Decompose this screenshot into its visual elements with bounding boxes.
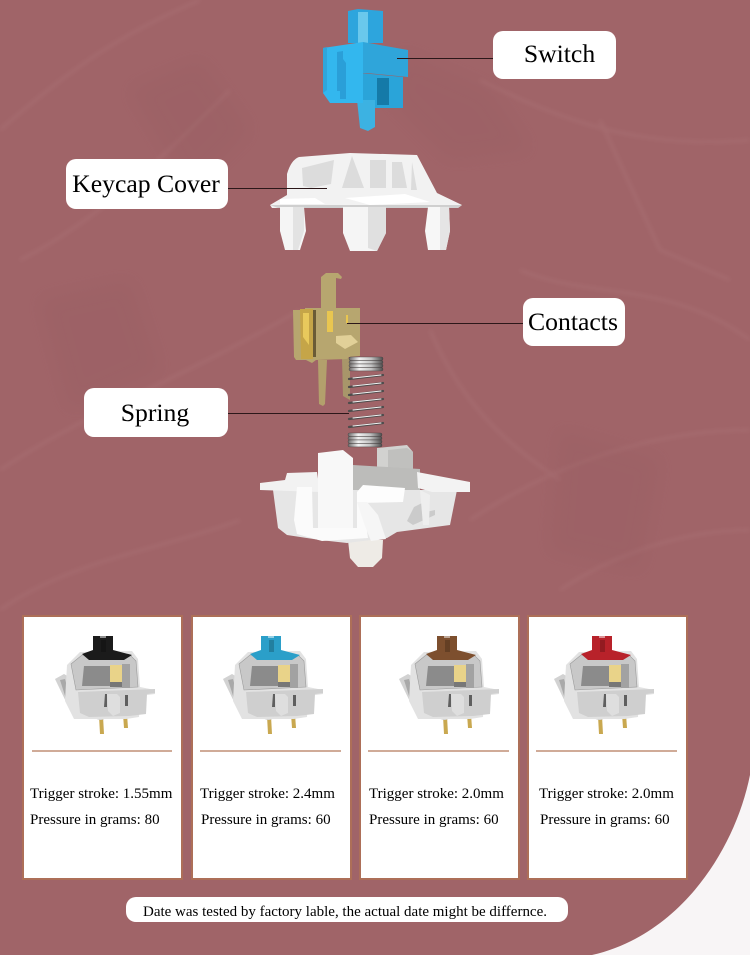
specs: blue switch [200, 786, 335, 828]
label: Keycap Cover: Keycap Cover [72, 169, 220, 198]
label: Spring: Spring [121, 398, 189, 427]
label: Contacts: Contacts [528, 307, 618, 336]
label: Switch [397, 31, 616, 79]
label: Keycap Cover [66, 159, 327, 209]
specs: red switch: Pressure in grams: 60 [540, 812, 670, 828]
bottom-right white curved corner [592, 775, 750, 955]
specs: brown switch [369, 786, 504, 828]
card: red switch [528, 616, 687, 879]
specs: black switch: Pressure in grams: 80 [30, 812, 160, 828]
label: Switch: Switch [524, 39, 595, 68]
specs: brown switch: Pressure in grams: 60 [369, 812, 499, 828]
part: white base housing [260, 445, 470, 567]
footnote [126, 897, 568, 922]
label: Contacts [347, 298, 625, 346]
specs: black switch: Trigger stroke: 1.55mm [30, 786, 173, 802]
specs: blue switch: Trigger stroke: 2.4mm [200, 786, 335, 802]
specs: red switch: Trigger stroke: 2.0mm [539, 786, 674, 802]
icon: red switch [554, 636, 654, 734]
specs: blue switch: Pressure in grams: 60 [201, 812, 331, 828]
card: brown switch [360, 616, 519, 879]
label: Spring [84, 388, 349, 437]
specs: brown switch: Trigger stroke: 2.0mm [369, 786, 504, 802]
specs: red switch [539, 786, 674, 828]
footnote: Date was tested by factory lable, the actual date might be differnce. [143, 904, 547, 920]
part: blue switch stem [323, 9, 408, 131]
card: black switch [23, 616, 182, 879]
icon: blue switch [223, 636, 323, 734]
specs: black switch [30, 786, 173, 828]
card: blue switch [192, 616, 351, 879]
part: keycap cover [270, 153, 462, 251]
part: brass contacts [293, 273, 360, 406]
exploded switch diagram [260, 9, 470, 567]
icon: black switch [55, 636, 155, 734]
icon: brown switch [399, 636, 499, 734]
part: coil spring [348, 357, 383, 447]
